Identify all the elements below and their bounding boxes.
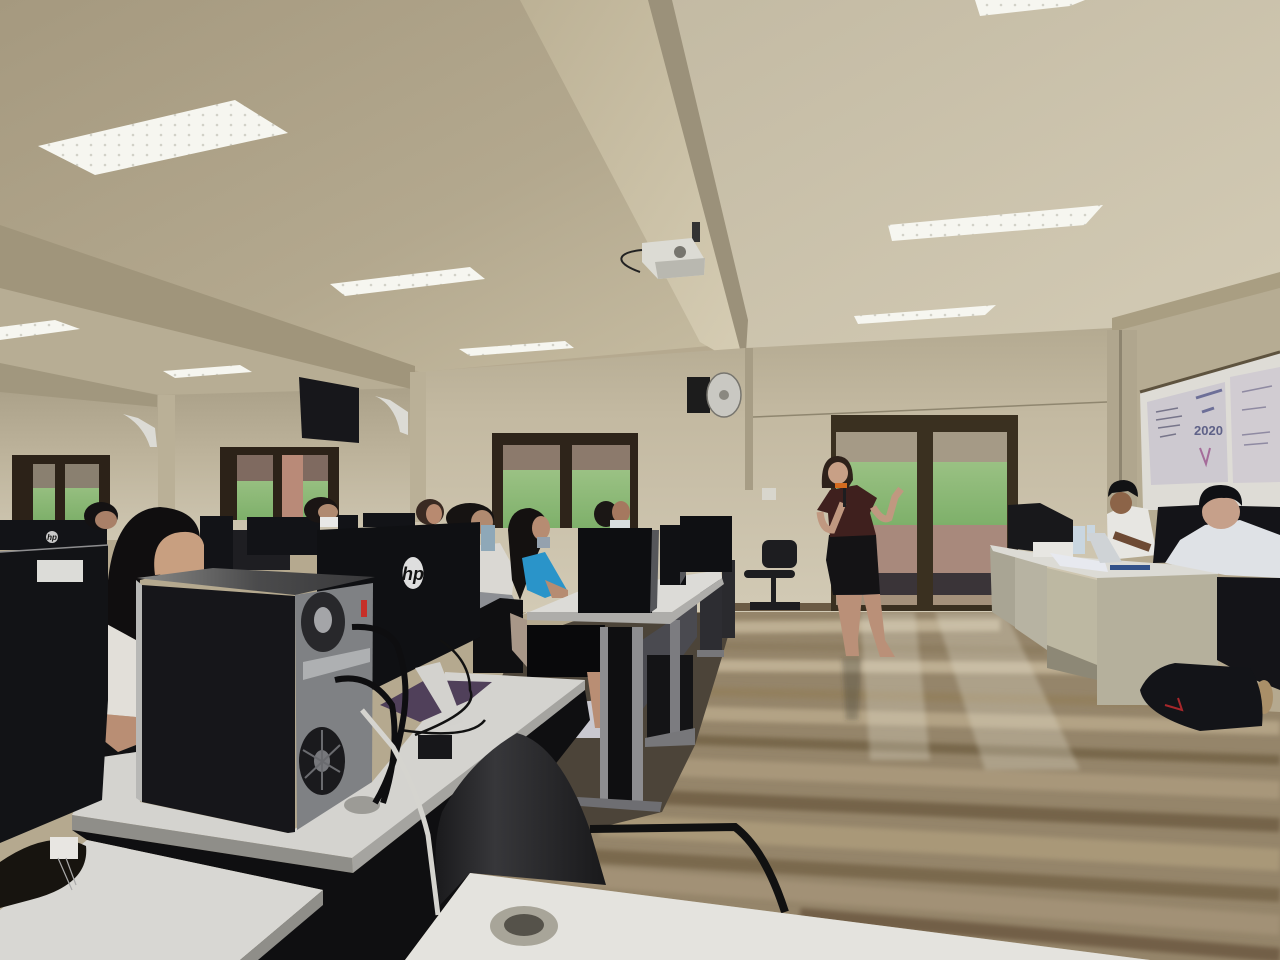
floor planks (560, 625, 1280, 955)
centre monitors and towers (578, 516, 732, 613)
arm: gesturing (873, 489, 901, 519)
poster: left (1147, 382, 1228, 485)
purple laptop and stand on desk (380, 640, 492, 759)
poster: 2020 label: 2020 (1194, 423, 1223, 438)
right wall trim and conduit column (1107, 272, 1280, 520)
front left desk (0, 840, 323, 960)
cable bundle with tag (0, 837, 86, 908)
modesty panel (642, 603, 697, 710)
foreground student (103, 507, 204, 770)
desk near end panel (1097, 573, 1218, 705)
silver expansion bracket (303, 648, 370, 680)
hair (822, 456, 853, 488)
whiteboard with posters (1140, 352, 1280, 510)
mesh chair and seated student lower body (473, 598, 605, 728)
front leg (577, 627, 662, 812)
third leg (697, 580, 724, 657)
hp logo (402, 557, 424, 589)
PC tower (136, 568, 438, 915)
wall fan: centre (707, 373, 741, 417)
centre desk top (522, 570, 724, 624)
wall television (299, 377, 359, 443)
ceiling: left section (0, 0, 720, 372)
poster: right (1230, 367, 1280, 483)
foreground HP monitor (317, 522, 480, 690)
laptop on desk (1087, 533, 1122, 563)
baseboard (735, 603, 1005, 611)
window reflections on floor (842, 612, 1080, 770)
far monitor hp logo (46, 531, 58, 543)
ceiling: right section (650, 0, 1280, 350)
man seated: left (1107, 480, 1157, 560)
chair arm (590, 827, 785, 912)
desk middle (1015, 555, 1047, 650)
hp logo: hp (402, 564, 424, 584)
ceiling beam (520, 0, 748, 368)
far girder (0, 363, 157, 407)
shoe (1255, 680, 1273, 714)
left ceiling girder (0, 225, 415, 390)
right wall (1112, 288, 1280, 540)
left far room wall (0, 385, 420, 540)
grommet (344, 796, 380, 814)
leg: right (863, 594, 895, 657)
fourth leg (722, 560, 735, 638)
wall fan: left (123, 396, 408, 447)
projector (621, 222, 705, 279)
left far room ceiling (0, 285, 415, 395)
desk top (990, 545, 1218, 578)
student in blue shirt (508, 508, 568, 600)
middle foreground desk (72, 672, 590, 960)
switch box (762, 488, 776, 500)
back wall picture rail (753, 402, 1107, 417)
second leg (645, 620, 695, 747)
foreground chair (435, 733, 785, 912)
water bottles (1073, 525, 1095, 554)
front right desk (405, 873, 1150, 960)
arm: holding microphone (820, 503, 843, 530)
pale reflection under desk (540, 700, 600, 738)
spare office chair (744, 540, 800, 610)
printer (1033, 542, 1073, 557)
cables (335, 627, 405, 803)
paper on desk (1050, 553, 1108, 572)
lower fan (299, 727, 345, 795)
columns (158, 348, 753, 522)
floor (430, 600, 1280, 960)
window: far left (12, 455, 110, 521)
desk computer and monitor (1008, 503, 1073, 552)
backpack (1140, 663, 1262, 731)
microphone (835, 483, 847, 507)
red tab (361, 600, 367, 617)
face (828, 462, 848, 484)
desk near recess (1047, 568, 1097, 665)
right desks (990, 503, 1218, 705)
window: left (220, 447, 339, 520)
shadow under centre desks (502, 612, 728, 830)
left foreground monitor (0, 545, 108, 843)
window: middle (492, 433, 638, 528)
man seated: right (1165, 485, 1280, 578)
leg: left (836, 595, 862, 656)
centre desk legs and panels (577, 560, 735, 812)
desk far (990, 547, 1015, 627)
top (817, 485, 877, 537)
man trousers (1217, 577, 1280, 690)
window: right (831, 415, 1018, 611)
far row of monitors (0, 513, 415, 570)
desk cable grommet (490, 906, 558, 946)
far students (84, 497, 444, 530)
student with mask (446, 503, 520, 612)
executive chair (1153, 505, 1280, 563)
student at back centre (594, 501, 630, 532)
back wall (415, 328, 1112, 612)
far monitor hp logo: hp (47, 533, 57, 542)
wall speaker (687, 377, 710, 413)
ceiling lights (0, 0, 1103, 378)
skirt (826, 535, 880, 595)
top fan grille (301, 592, 345, 652)
presenter (817, 456, 901, 657)
